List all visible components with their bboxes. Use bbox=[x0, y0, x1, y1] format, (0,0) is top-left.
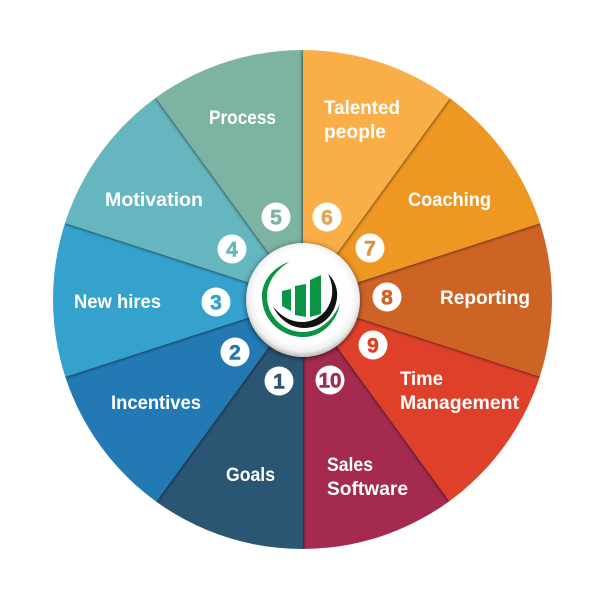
logo: green crescent bbox=[262, 262, 340, 337]
segment 1: Goals bbox=[156, 346, 306, 549]
logo: bars bbox=[282, 275, 321, 317]
badge 1: 1 bbox=[273, 370, 285, 394]
label: Talented people bbox=[324, 97, 400, 143]
segment 9: Time Management bbox=[335, 318, 540, 502]
segment 10: Sales Software bbox=[303, 346, 450, 549]
badge 2 bbox=[220, 338, 250, 366]
logo: black crescent bbox=[273, 274, 337, 328]
label: Time Management: Time bbox=[400, 368, 443, 390]
badge 10 bbox=[316, 366, 344, 394]
badge 7: 7 bbox=[364, 238, 376, 260]
logo bbox=[262, 262, 340, 337]
center hub bbox=[246, 243, 360, 357]
badge 8: 8 bbox=[381, 286, 393, 310]
badge 10: 10 bbox=[318, 370, 342, 392]
label: Talented people: Talented bbox=[324, 97, 400, 119]
badge 9: 9 bbox=[367, 334, 379, 358]
segment 2: Incentives bbox=[65, 318, 271, 502]
label: New hires: New hires bbox=[74, 291, 161, 313]
badge 5: 5 bbox=[270, 206, 282, 230]
label: Talented people: people bbox=[324, 121, 386, 143]
badge 8 bbox=[372, 282, 402, 312]
badge 4 bbox=[218, 234, 246, 264]
badge 7 bbox=[356, 234, 384, 262]
segment 6: Talented people bbox=[300, 50, 452, 256]
label: Sales Software: Sales bbox=[327, 454, 373, 476]
badge 6 bbox=[312, 202, 342, 232]
badge 1 bbox=[264, 366, 294, 396]
label: Sales Software: Software bbox=[327, 478, 408, 500]
label: Process: Process bbox=[209, 107, 276, 129]
badge 3 bbox=[202, 288, 230, 316]
segment 7: Coaching bbox=[336, 98, 540, 285]
label: Motivation: Motivation bbox=[105, 189, 203, 211]
segment 4: Motivation bbox=[64, 97, 270, 285]
badge 9 bbox=[358, 330, 388, 360]
badge 3: 3 bbox=[210, 292, 222, 314]
segment 5: Process bbox=[154, 50, 303, 256]
badge 6: 6 bbox=[321, 206, 333, 230]
label: Goals: Goals bbox=[226, 464, 275, 486]
wheel segments bbox=[53, 50, 553, 550]
segment 3: New hires bbox=[53, 222, 250, 379]
badge 2: 2 bbox=[229, 342, 241, 364]
segment 8: Reporting bbox=[356, 222, 552, 379]
label: Time Management: Management bbox=[400, 392, 519, 414]
badge 4: 4 bbox=[226, 238, 238, 262]
label: Sales Software bbox=[327, 454, 408, 500]
label: Time Management bbox=[400, 368, 519, 414]
badge 5 bbox=[262, 202, 290, 232]
label: Reporting: Reporting bbox=[440, 287, 530, 309]
label: Coaching: Coaching bbox=[408, 189, 491, 211]
label: Incentives: Incentives bbox=[111, 392, 201, 414]
